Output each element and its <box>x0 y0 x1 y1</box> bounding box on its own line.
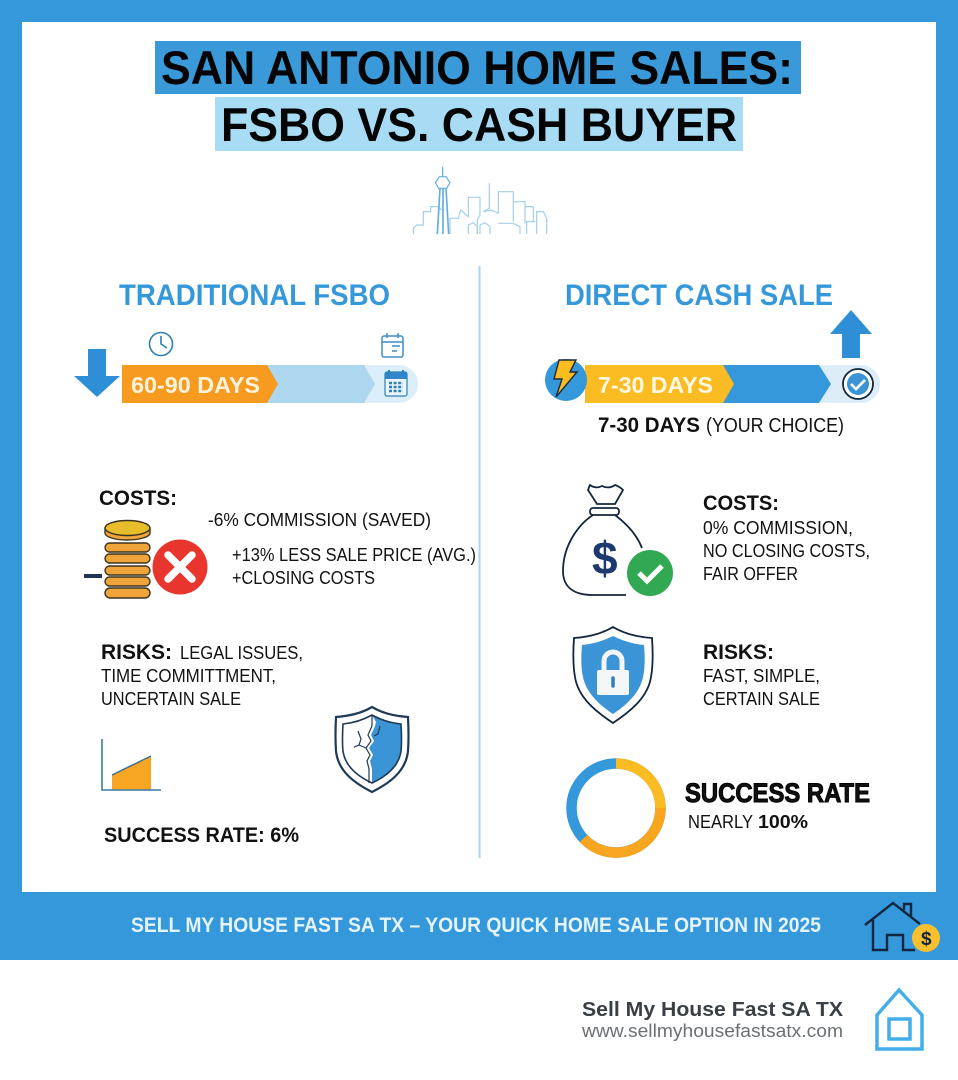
risks text: TIME COMMITTMENT, <box>101 666 276 686</box>
icon: house with dollar coin: $ <box>921 929 932 950</box>
risks text: RISKS: <box>703 641 774 664</box>
brand text: Sell My House Fast SA TX <box>582 999 844 1021</box>
timeline caption: 7-30 DAYS <box>598 414 700 437</box>
icon: cracked shield <box>336 707 408 792</box>
icon: coin stack with minus <box>84 520 150 598</box>
costs text: FAIR OFFER <box>703 564 798 584</box>
title <box>155 41 801 151</box>
icon: filled calendar <box>385 370 407 396</box>
title: FSBO VS. CASH BUYER <box>221 98 737 151</box>
heading: Direct Cash Sale: DIRECT CASH SALE <box>565 279 833 312</box>
timeline caption: (YOUR CHOICE) <box>706 415 844 437</box>
costs text: 0% COMMISSION, <box>703 518 853 538</box>
risks text: RISKS: <box>101 641 172 664</box>
white lower strip <box>0 960 958 1080</box>
success rate label: SUCCESS RATE <box>685 778 870 808</box>
timeline caption <box>598 414 844 437</box>
timeline bar: 60-90 days <box>122 365 418 403</box>
costs text: NO CLOSING COSTS, <box>703 541 870 561</box>
icon: check badge <box>843 369 873 399</box>
chart: success donut <box>572 764 661 853</box>
icon: brand house logo <box>877 990 922 1049</box>
icon: lightning bolt <box>545 359 587 401</box>
risks text <box>703 641 820 709</box>
risks text: CERTAIN SALE <box>703 689 820 709</box>
icon: red X <box>152 540 208 594</box>
icon: house with dollar coin <box>865 903 940 952</box>
risks text: FAST, SIMPLE, <box>703 666 820 686</box>
risks text: LEGAL ISSUES, <box>180 643 303 663</box>
costs text: COSTS: <box>703 492 779 515</box>
icon: shield with lock <box>573 627 653 723</box>
cost line: sale price: +13% LESS SALE PRICE (AVG.) <box>232 545 476 565</box>
costs text <box>703 492 870 584</box>
success rate: SUCCESS RATE: 6% <box>104 824 299 847</box>
cost line: commission: -6% COMMISSION (SAVED) <box>208 510 431 530</box>
icon: clock <box>150 332 172 356</box>
timeline bar: 7-30 days <box>585 365 880 403</box>
icon: money bag with check: $ <box>592 532 618 584</box>
icon: outlined calendar <box>382 333 403 357</box>
brand text <box>581 999 844 1041</box>
white content panel <box>22 22 936 892</box>
success rate value <box>688 812 808 832</box>
success rate value: 100% <box>758 812 808 832</box>
footer banner text: SELL MY HOUSE FAST SA TX – YOUR QUICK HOME SALE OPTION IN 2025 <box>131 914 821 937</box>
panel: Direct Cash Sale <box>545 279 880 853</box>
success rate value: NEARLY <box>688 812 753 832</box>
chart: small area chart <box>102 739 161 790</box>
timeline bar: 7-30 days: 7-30 DAYS <box>598 372 713 398</box>
cost line: closing costs: +CLOSING COSTS <box>232 568 375 588</box>
center divider <box>478 266 480 858</box>
risks text: UNCERTAIN SALE <box>101 689 241 709</box>
icon: down arrow <box>74 349 120 397</box>
costs heading: COSTS: <box>99 487 177 510</box>
risks text <box>101 641 303 709</box>
panel: Traditional FSBO <box>74 279 476 847</box>
icon: up arrow <box>830 310 872 358</box>
icon: San Antonio skyline <box>413 167 547 234</box>
icon: money bag with check <box>563 485 673 596</box>
timeline bar: 60-90 days: 60-90 DAYS <box>131 372 260 398</box>
heading: Traditional FSBO: TRADITIONAL FSBO <box>119 279 390 312</box>
brand text: www.sellmyhousefastsatx.com <box>581 1021 843 1041</box>
title: SAN ANTONIO HOME SALES: <box>161 41 793 94</box>
